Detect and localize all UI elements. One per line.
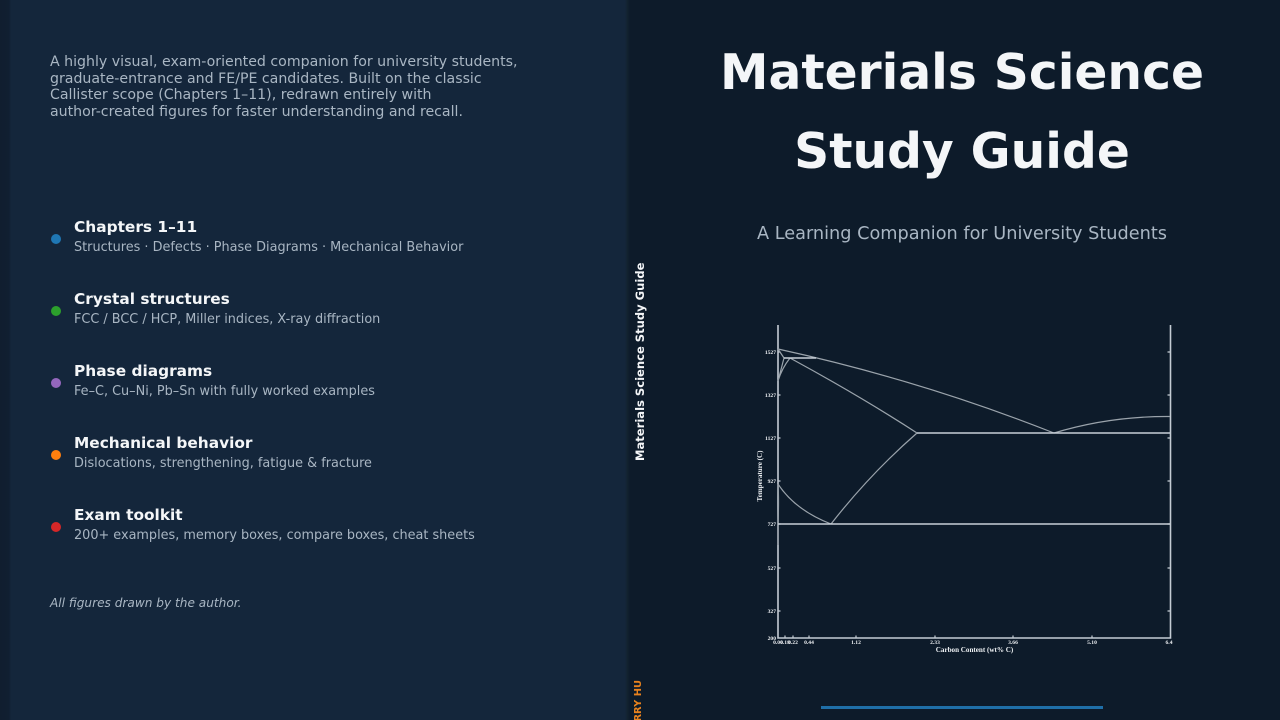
feature: chapters: Chapters 1–11: [74, 218, 197, 236]
axis tick labels: 1527: [765, 350, 776, 356]
spine title: Materials Science Study Guide: [633, 262, 647, 461]
feature: phase diagrams: Fe–C, Cu–Ni, Pb–Sn with fully worked examples: [74, 384, 375, 399]
back cover spine shadow: [0, 0, 11, 720]
feature: mechanical behavior: Dislocations, strengthening, fatigue & fracture: [74, 456, 372, 471]
feature: exam toolkit: [51, 506, 475, 543]
axis tick labels: [765, 350, 1173, 646]
feature: phase diagrams: Phase diagrams: [74, 362, 212, 380]
feature: crystal structures: [51, 290, 380, 327]
feature: exam toolkit: 200+ examples, memory boxes, compare boxes, cheat sheets: [74, 528, 475, 543]
axes: [778, 325, 1170, 638]
fold between covers: [625, 0, 630, 720]
axis tick labels: 6.4: [1166, 640, 1173, 646]
intro text: Callister scope (Chapters 1–11), redrawn entirely with: [50, 87, 432, 103]
title: Materials Science: [720, 45, 1204, 101]
feature: exam toolkit: Exam toolkit: [74, 506, 183, 524]
intro text: author-created figures for faster understanding and recall.: [50, 104, 463, 120]
axis tick labels: 1.12: [851, 640, 861, 646]
feature: crystal structures: FCC / BCC / HCP, Miller indices, X-ray diffraction: [74, 312, 380, 327]
feature: phase diagrams: [51, 362, 375, 399]
phase boundaries: [778, 349, 1170, 545]
panel: back cover: [0, 0, 627, 720]
title: [720, 45, 1204, 180]
feature: crystal structures: Crystal structures: [74, 290, 230, 308]
axis tick labels: 1327: [765, 393, 776, 399]
axis tick labels: 0.00: [773, 640, 783, 646]
intro text: A highly visual, exam-oriented companion for university students,: [50, 54, 518, 70]
axis tick labels: 2.33: [930, 640, 940, 646]
axis tick labels: 3.66: [1008, 640, 1018, 646]
y axis label: Temperature (C): [756, 450, 764, 502]
axis tick labels: 527: [768, 566, 776, 572]
axis tick labels: 927: [768, 479, 776, 485]
axis tick labels: 0.44: [804, 640, 814, 646]
intro text: [50, 54, 518, 120]
axis tick labels: 327: [768, 609, 776, 615]
axis tick labels: 0.18: [780, 640, 790, 646]
x axis label: Carbon Content (wt% C): [936, 646, 1014, 654]
feature: chapters: Structures · Defects · Phase Diagrams · Mechanical Behavior: [74, 240, 463, 255]
intro text: graduate-entrance and FE/PE candidates. Built on the classic: [50, 71, 482, 87]
subtitle: A Learning Companion for University Students: [757, 224, 1167, 244]
isotherm lines: [778, 358, 1170, 524]
axis tick labels: 0.22: [788, 640, 798, 646]
chart: iron-carbon phase diagram: [756, 325, 1173, 654]
feature: mechanical behavior: [51, 434, 372, 471]
axis tick labels: 1127: [765, 436, 776, 442]
feature: chapters: [51, 218, 464, 255]
title: Study Guide: [794, 124, 1130, 180]
feature: mechanical behavior: Mechanical behavior: [74, 434, 253, 452]
author note: All figures drawn by the author.: [50, 596, 241, 610]
axis tick labels: 200: [768, 636, 776, 642]
axis tick labels: 5.10: [1087, 640, 1097, 646]
axis tick labels: 727: [768, 522, 776, 528]
accent bar: [821, 706, 1103, 709]
